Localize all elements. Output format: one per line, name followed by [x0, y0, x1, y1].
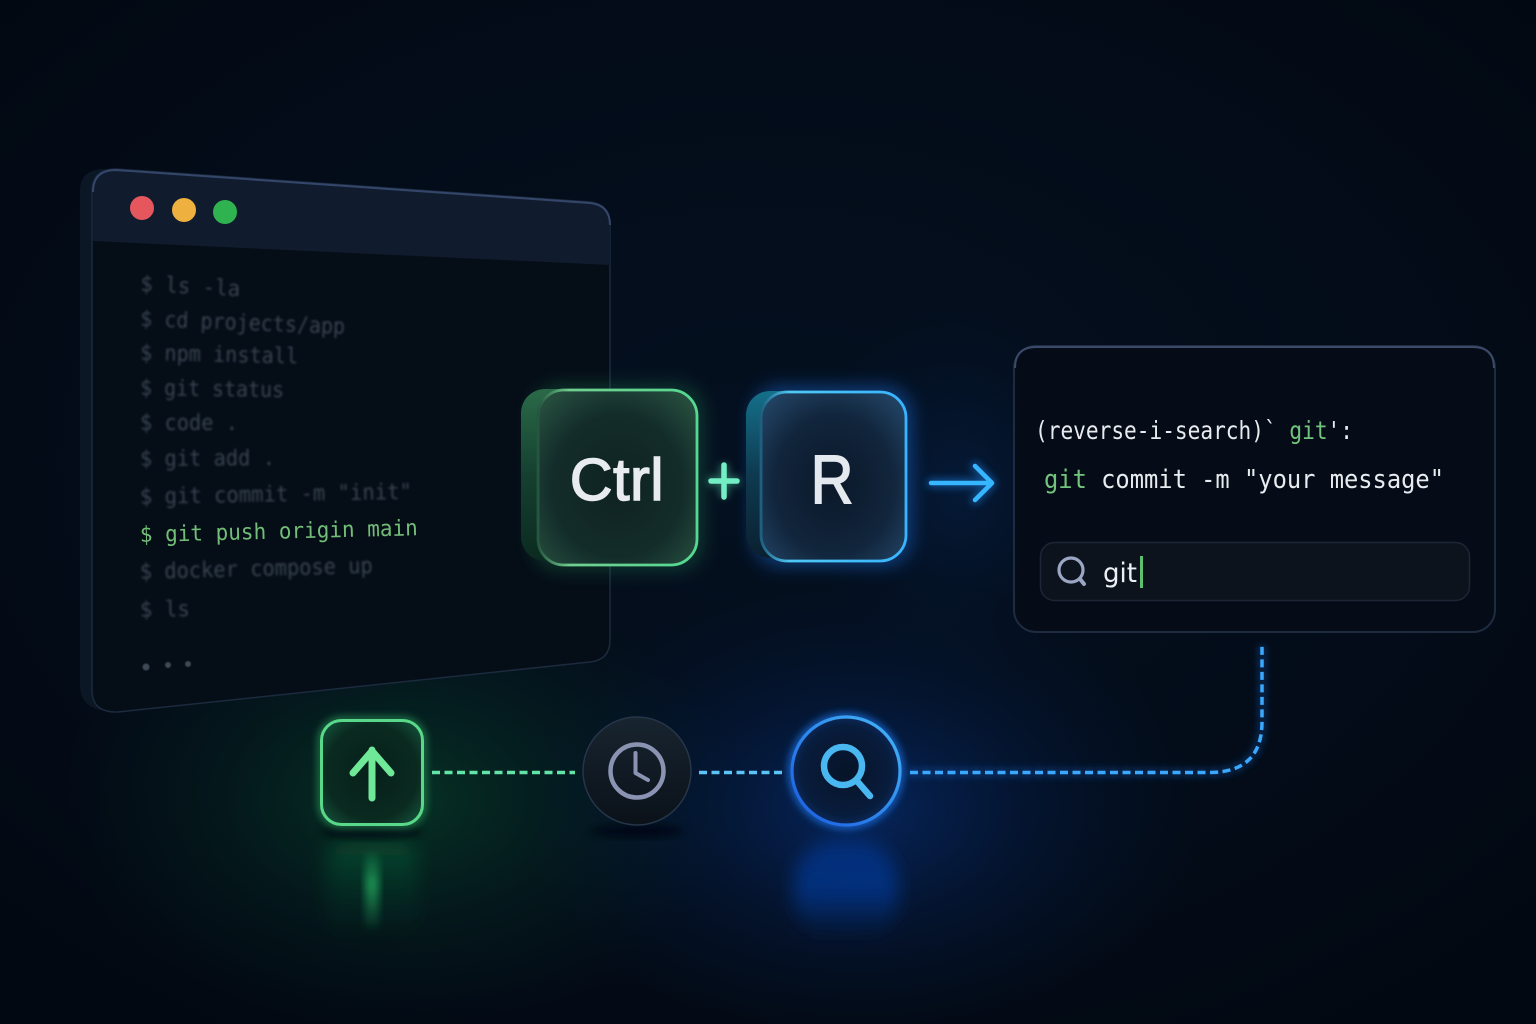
ellipsis dots: [142, 661, 191, 670]
terminal side depth: [80, 169, 120, 712]
terminal title bar: [93, 170, 610, 265]
blurred command history: $ npm install: [140, 341, 298, 370]
panel: terminal window: [80, 169, 610, 712]
Ctrl key side: [521, 389, 581, 561]
blurred command history: $ ls -la: [140, 272, 241, 302]
window control dots: [130, 196, 237, 224]
blurred command history: $ cd projects/app: [140, 307, 346, 340]
magnifier: [824, 747, 870, 796]
blurred command history: $ git add .: [140, 446, 275, 472]
highlighted command: $ git push origin main: [140, 516, 418, 548]
connector: blue dashes: [699, 769, 784, 776]
R label: R: [811, 441, 853, 518]
panel: reverse search: [1014, 346, 1495, 632]
matched command: git commit -m "your message": [1044, 465, 1444, 495]
plus sign: [708, 464, 740, 497]
icon: magnifier: [1059, 558, 1084, 584]
search prompt line: (reverse-i-search)` git':: [1035, 416, 1353, 445]
connector: dashed path to search panel: [910, 643, 1262, 772]
key: R: [746, 386, 912, 566]
blurred command history: $ git commit -m "init": [140, 480, 412, 510]
icon: clock button: [583, 717, 691, 837]
search input: [1040, 542, 1470, 600]
icon: upload key: [321, 720, 423, 838]
Ctrl label: Ctrl: [570, 447, 664, 513]
clock face: [610, 744, 664, 798]
connector: green dashes: [432, 769, 575, 776]
blurred command history: $ code .: [140, 411, 238, 436]
blurred command history: [140, 272, 412, 623]
arrow to search panel: [931, 466, 992, 500]
input text: git: [1103, 558, 1137, 589]
blurred command history: $ git status: [140, 376, 284, 403]
R key side: [746, 391, 806, 558]
key: Ctrl: [521, 384, 704, 571]
icon: up arrow: [353, 750, 391, 798]
blurred command history: $ ls: [140, 597, 190, 623]
reflection: blue: [794, 840, 898, 942]
icon: search button: [792, 717, 900, 825]
text cursor: [1140, 556, 1143, 588]
blurred command history: $ docker compose up: [140, 554, 373, 585]
reflection: green: [326, 842, 418, 942]
